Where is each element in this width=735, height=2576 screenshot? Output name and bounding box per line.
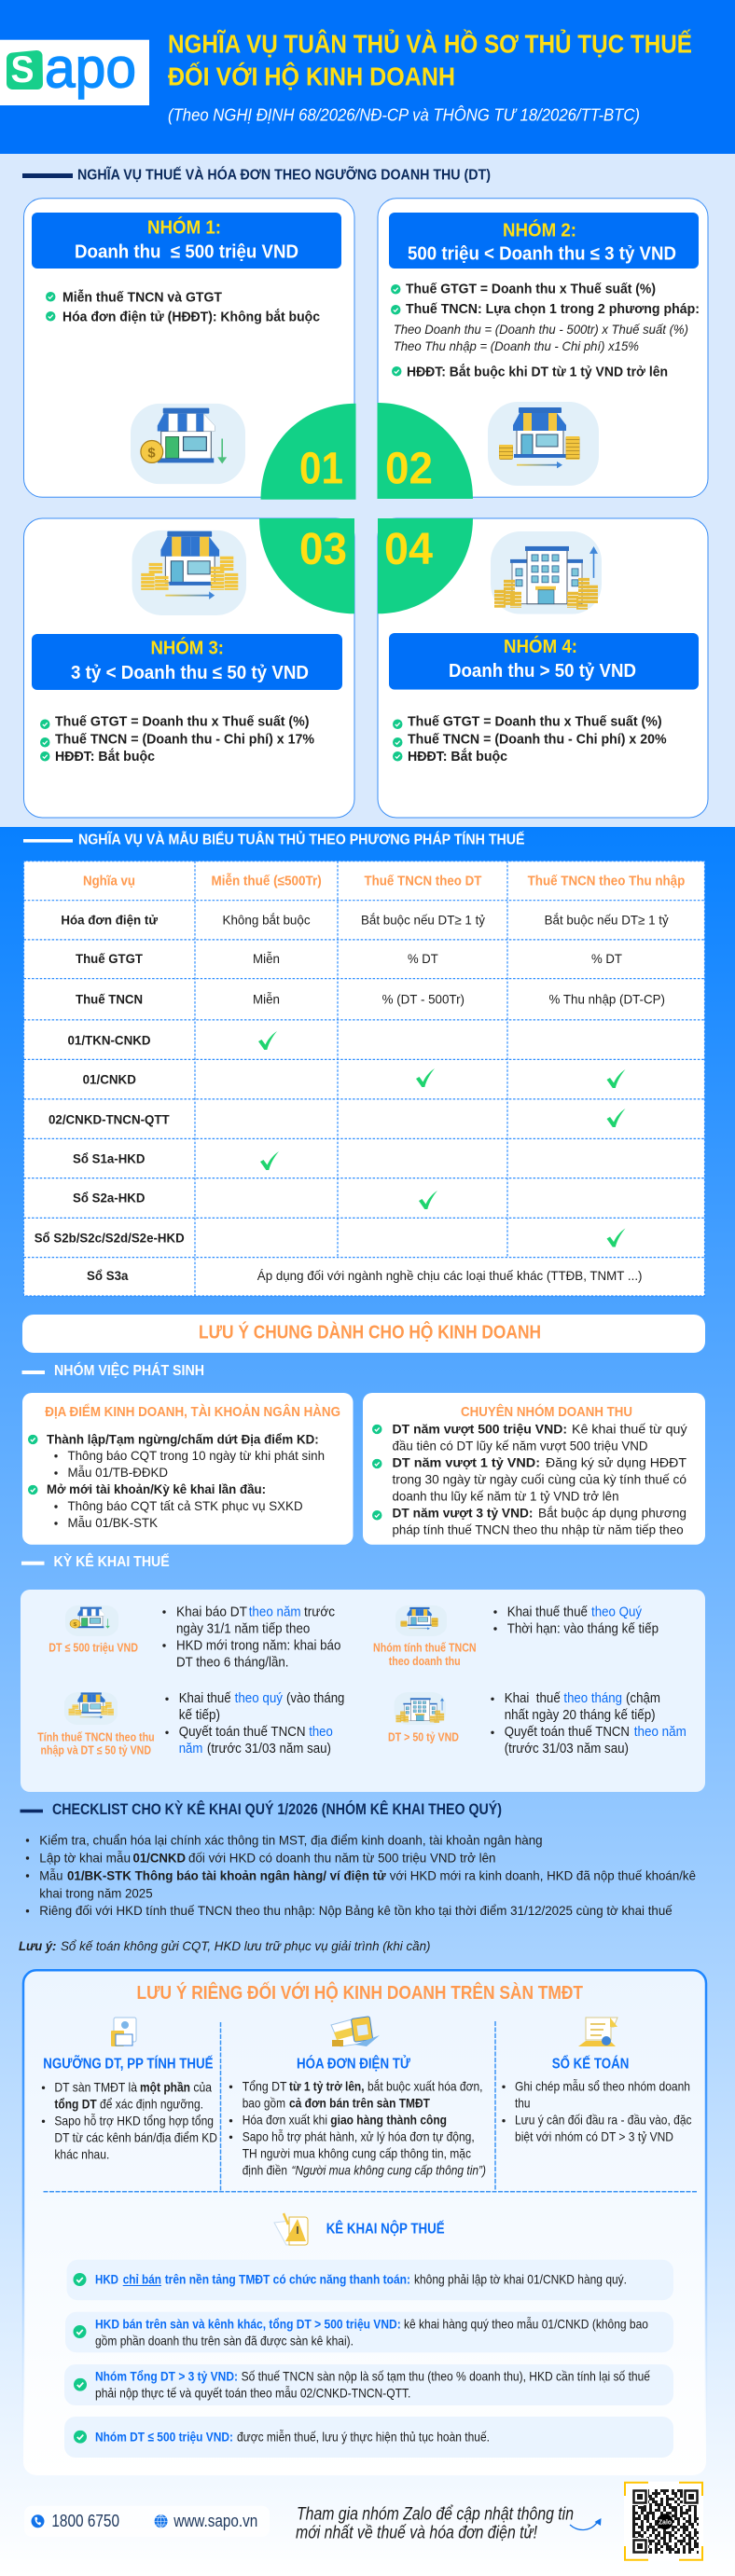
period: revenue over 50 billion: (trước 31/03 năm sau) <box>505 1742 629 1756</box>
filing note 1 <box>67 2260 673 2300</box>
checklist items: Riêng đối với HKD tính thuế TNCN theo thu nhập: Nộp Bảng kê tồn kho tại thời điểm 31/12/2025 cùng tờ khai thuế <box>39 1903 673 1918</box>
icon: phone <box>32 2514 45 2528</box>
icon: clipboard with warning <box>274 2213 308 2245</box>
banner: general notes <box>22 1315 705 1353</box>
panel: group 2: HĐĐT: Bắt buộc khi DT từ 1 tỷ VND trở lên <box>407 363 668 379</box>
period: income based tax group: năm <box>179 1742 202 1756</box>
title <box>168 29 692 91</box>
panel: group 2: Thuế TNCN: Lựa chọn 1 trong 2 phương pháp: <box>406 301 700 317</box>
contact box: www.sapo.vn <box>173 2512 257 2530</box>
panel: e-commerce notes <box>23 1970 706 2475</box>
checklist items: Mẫu <box>39 1867 62 1882</box>
panel: group 4: NHÓM 4: <box>504 635 577 657</box>
contact box <box>24 2506 270 2537</box>
panel: group 4: Doanh thu > 50 tỷ VND <box>449 661 636 682</box>
callout: join Zalo group: mới nhất về thuế và hóa đơn điện tử! <box>296 2523 538 2542</box>
panel: group 3: Thuế TNCN = (Doanh thu - Chi phí) x 17% <box>55 731 314 747</box>
checklist items: Lập tờ khai mẫu <box>39 1850 131 1865</box>
icon: globe <box>155 2514 168 2528</box>
filing note 4 <box>64 2417 673 2458</box>
number quarters 01 02 03 04: 04 <box>384 525 433 574</box>
panel: business location and bank account: Mẫu 01/TB-ĐĐKD <box>67 1465 168 1480</box>
checklist items: với HKD mới ra kinh doanh, HKD đã nộp thuế khoán/kê <box>390 1867 696 1882</box>
column: threshold and tax method: khác nhau. <box>54 2146 109 2161</box>
checklist items: đối với HKD có doanh thu năm từ 500 triệu VND trở lên <box>188 1850 496 1865</box>
table check marks <box>258 1031 625 1247</box>
table rows: Miễn <box>253 991 280 1006</box>
panel: business location and bank account: Thông báo CQT tất cả STK phục vụ SXKD <box>67 1498 303 1513</box>
table rows: Sổ S2b/S2c/S2d/S2e-HKD <box>35 1231 185 1246</box>
panel: group 1 <box>24 199 354 497</box>
heading: filing and payment: KÊ KHAI NỘP THUẾ <box>326 2219 445 2237</box>
panel: business location and bank account <box>22 1393 353 1545</box>
column: threshold and tax method: để xác định ngưỡng. <box>100 2096 203 2111</box>
panel: group 1: Hóa đơn điện tử (HĐĐT): Không bắt buộc <box>62 308 320 324</box>
table rows: 01/CNKD <box>83 1072 136 1087</box>
table rows: 01/TKN-CNKD <box>67 1032 151 1047</box>
column: accounting books: SỔ KẾ TOÁN <box>552 2054 629 2072</box>
column: threshold and tax method: tổng DT <box>54 2096 97 2111</box>
column: e-invoice: từ 1 tỷ trở lên, <box>289 2078 364 2093</box>
column: e-invoice: bắt buộc xuất hóa đơn, <box>368 2078 483 2093</box>
period: revenue under 500 million: DT ≤ 500 triệu VND <box>49 1641 138 1655</box>
period: revenue based tax group: Khai thuế thuế <box>507 1605 588 1619</box>
table rows: Miễn <box>253 951 280 966</box>
header banner <box>0 0 735 154</box>
table rows: Không bắt buộc <box>222 912 311 927</box>
period: income based tax group: Quyết toán thuế TNCN <box>179 1725 306 1740</box>
panel: revenue group change: CHUYÊN NHÓM DOANH THU <box>461 1403 632 1420</box>
filing note 2: HKD bán trên sàn và kênh khác, tổng DT > 500 triệu VND: <box>95 2316 401 2331</box>
logo: Sapo <box>0 37 149 105</box>
number quarters 01 02 03 04 <box>259 403 473 613</box>
column: accounting books: thu <box>515 2095 530 2110</box>
panel: revenue group change: Bắt buộc áp dụng phương <box>538 1505 686 1520</box>
period: income based tax group: theo <box>309 1725 333 1740</box>
period: revenue based tax group <box>373 1605 659 1668</box>
section heading: compliance table: NGHĨA VỤ VÀ MẪU BIỂU TUÂN THỦ THEO PHƯƠNG PHÁP TÍNH THUẾ <box>78 829 525 847</box>
period: revenue under 500 million: ngày 31/1 năm tiếp theo <box>176 1621 310 1636</box>
lower gradient background <box>0 827 735 2576</box>
table rows: Sổ S1a-HKD <box>73 1150 146 1165</box>
panel: revenue group change: Đăng ký sử dụng HĐĐT <box>546 1454 686 1469</box>
period: revenue under 500 million: theo năm <box>249 1605 301 1619</box>
panel: group 2: Theo Thu nhập = (Doanh thu - Chi phí) x15% <box>394 338 639 353</box>
title: ĐỐI VỚI HỘ KINH DOANH <box>168 62 455 91</box>
panel: business location and bank account: Mở mới tài khoản/Kỳ kê khai lần đầu: <box>47 1481 266 1496</box>
section heading: thresholds <box>22 165 491 184</box>
table rows: Thuế TNCN <box>76 991 143 1006</box>
panel: business location and bank account: Thành lập/Tạm ngừng/chấm dứt Địa điểm KD: <box>47 1431 319 1446</box>
note: accounting books: Sổ kế toán không gửi CQT, HKD lưu trữ phục vụ giải trình (khi cần) <box>61 1938 431 1953</box>
panel: revenue group change: đầu tiên có DT lũy kế năm vượt 500 triệu VND <box>392 1438 647 1453</box>
panel title: LƯU Ý RIÊNG ĐỐI VỚI HỘ KINH DOANH TRÊN SÀN TMĐT <box>136 1981 583 2004</box>
panel: business location and bank account: ĐỊA ĐIỂM KINH DOANH, TÀI KHOẢN NGÂN HÀNG <box>45 1403 340 1420</box>
column: e-invoice: “Người mua không cung cấp thông tin”) <box>291 2162 486 2177</box>
panel: revenue group change: doanh thu lũy kế năm từ 1 tỷ VND trở lên <box>392 1488 619 1503</box>
checklist items: khai trong năm 2025 <box>39 1885 153 1900</box>
table rows: Sổ S3a <box>87 1268 129 1283</box>
period: income based tax group: nhập và DT ≤ 50 tỷ VND <box>41 1743 151 1757</box>
period: revenue under 500 million <box>49 1605 340 1670</box>
column: threshold and tax method: một phần <box>140 2079 190 2094</box>
table rows: Sổ S2a-HKD <box>73 1190 146 1205</box>
heading: arising tasks: NHÓM VIỆC PHÁT SINH <box>54 1361 204 1379</box>
filing note 2: kê khai hàng quý theo mẫu 01/CNKD (không bao <box>404 2316 648 2331</box>
column: e-invoice: giao hàng thành công <box>330 2112 447 2127</box>
checklist items: 01/BK-STK Thông báo tài khoản ngân hàng/ ví điện tử <box>67 1867 387 1882</box>
number quarters 01 02 03 04: 03 <box>299 525 347 574</box>
panel: group 3: Thuế GTGT = Doanh thu x Thuế suất (%) <box>55 713 310 729</box>
column: accounting books <box>502 2018 692 2143</box>
period: revenue under 500 million: trước <box>304 1605 335 1619</box>
filing note 1: chỉ bán <box>123 2271 161 2286</box>
subtitle: (Theo NGHỊ ĐỊNH 68/2026/NĐ-CP và THÔNG TƯ 18/2026/TT-BTC) <box>168 104 640 124</box>
number quarters 01 02 03 04: 01 <box>299 444 343 493</box>
table header row: Miễn thuế (≤500Tr) <box>211 873 322 889</box>
table rows: Áp dụng đối với ngành nghề chịu các loại thuế khác (TTĐB, TNMT ...) <box>257 1268 642 1283</box>
panel: group 3: NHÓM 3: <box>151 637 224 659</box>
table rows <box>35 912 669 1283</box>
panel: business location and bank account: Mẫu 01/BK-STK <box>67 1515 159 1530</box>
column: e-invoice: Hóa đơn xuất khi <box>243 2112 327 2127</box>
top background <box>0 154 735 827</box>
period: income based tax group: (vào tháng <box>286 1691 344 1706</box>
period: revenue under 500 million: HKD mới trong năm: khai báo <box>176 1638 340 1653</box>
note: accounting books: Lưu ý: <box>19 1938 56 1953</box>
panel: group 2: Thuế GTGT = Doanh thu x Thuế suất (%) <box>406 281 656 296</box>
panel: revenue group change <box>363 1393 705 1545</box>
heading: arising tasks <box>22 1361 204 1379</box>
filing note 3: Nhóm Tổng DT > 3 tỷ VND: <box>95 2368 238 2383</box>
panel: filing periods <box>21 1590 705 1792</box>
icon: store with coin stacks <box>132 530 246 615</box>
filing note 3: Số thuế TNCN sàn nộp là số tạm thu (theo % doanh thu), HKD cần tính lại số thuế <box>242 2368 650 2383</box>
heading: checklist: CHECKLIST CHO KỲ KÊ KHAI QUÝ 1/2026 (NHÓM KÊ KHAI THEO QUÝ) <box>52 1800 502 1818</box>
table rows: % DT <box>408 951 438 966</box>
filing note 4: Nhóm DT ≤ 500 triệu VND: <box>95 2429 233 2444</box>
panel: revenue group change: Kê khai thuế từ quý <box>572 1421 687 1436</box>
column: threshold and tax method: của <box>193 2079 212 2094</box>
table header row <box>83 873 685 889</box>
table header row: Thuế TNCN theo DT <box>364 874 482 889</box>
period: income based tax group: theo quý <box>235 1691 284 1706</box>
period: revenue over 50 billion <box>388 1691 686 1756</box>
filing note 1: HKD <box>95 2271 118 2286</box>
filing note 1: không phải lập tờ khai 01/CNKD hàng quý. <box>414 2271 627 2286</box>
period: income based tax group: (trước 31/03 năm sau) <box>207 1742 331 1756</box>
column: e-invoice: HÓA ĐƠN ĐIỆN TỬ <box>297 2054 411 2072</box>
column: threshold and tax method: DT sàn TMĐT là <box>54 2079 137 2094</box>
column: threshold and tax method: DT từ các kênh bán/địa điểm KD <box>54 2129 217 2144</box>
period: revenue over 50 billion: theo năm <box>634 1725 686 1740</box>
table header row: Thuế TNCN theo Thu nhập <box>528 874 685 889</box>
panel: group 1: NHÓM 1: <box>147 216 221 239</box>
banner: general notes: LƯU Ý CHUNG DÀNH CHO HỘ KINH DOANH <box>199 1321 541 1343</box>
panel: revenue group change: trong 30 ngày từ ngày cuối cùng của kỳ tính thuế có <box>392 1471 686 1486</box>
panel: group 4: HĐĐT: Bắt buộc <box>408 748 507 765</box>
icon: invoice and calculator <box>331 2017 380 2046</box>
arrow to QR code <box>570 2518 601 2529</box>
period: income based tax group: Tính thuế TNCN theo thu <box>37 1730 155 1744</box>
checklist items: Kiểm tra, chuẩn hóa lại chính xác thông tin MST, địa điểm kinh doanh, tài khoản ngân hàng <box>39 1832 543 1847</box>
panel: group 3 <box>24 518 354 818</box>
QR code: Zalo <box>659 2519 672 2527</box>
logo: Sapo: apo <box>45 37 136 99</box>
panel: group 2: 500 triệu < Doanh thu ≤ 3 tỷ VND <box>408 244 676 265</box>
icon: receipt with coins <box>578 2018 617 2046</box>
panel: group 3: HĐĐT: Bắt buộc <box>55 748 155 765</box>
period: revenue over 50 billion: Quyết toán thuế TNCN <box>505 1725 630 1740</box>
filing note 3 <box>64 2364 673 2405</box>
panel: group 3: 3 tỷ < Doanh thu ≤ 50 tỷ VND <box>71 663 309 683</box>
column: e-invoice <box>229 2017 486 2177</box>
heading: filing and payment <box>274 2213 445 2245</box>
panel: group 4: Thuế TNCN = (Doanh thu - Chi phí) x 20% <box>408 731 667 747</box>
table rows: Bắt buộc nếu DT≥ 1 tỷ <box>361 912 485 927</box>
panel: group 2: Theo Doanh thu = (Doanh thu - 500tr) x Thuế suất (%) <box>394 322 688 337</box>
column: e-invoice: Tổng DT <box>243 2078 287 2093</box>
contact box: 1800 6750 <box>51 2512 119 2530</box>
table header row: Nghĩa vụ <box>83 874 135 889</box>
period: income based tax group: kế tiếp) <box>179 1708 220 1723</box>
column: threshold and tax method: Sapo hỗ trợ HKD tổng hợp tổng <box>54 2113 214 2128</box>
table rows: 02/CNKD-TNCN-QTT <box>49 1111 170 1126</box>
period: revenue based tax group: theo Quý <box>591 1605 643 1619</box>
panel: group 1: Doanh thu ≤ 500 triệu VND <box>75 242 298 263</box>
table rows: Hóa đơn điện tử <box>61 912 159 927</box>
column: accounting books: Ghi chép mẫu sổ theo nhóm doanh <box>515 2078 690 2093</box>
icon: documents and calculator <box>111 2018 136 2046</box>
filing note 2: gồm phần doanh thu trên sàn đã được sàn kê khai). <box>95 2333 354 2348</box>
column: e-invoice: định điền <box>243 2162 287 2177</box>
icon: store with small coins <box>488 402 599 486</box>
column: threshold and tax method: NGƯỠNG DT, PP TÍNH THUẾ <box>43 2053 214 2072</box>
period: revenue over 50 billion: (chậm <box>626 1691 660 1706</box>
table rows: Thuế GTGT <box>76 951 143 966</box>
period: revenue based tax group: Nhóm tính thuế TNCN <box>373 1641 477 1655</box>
heading: filing period <box>21 1552 170 1570</box>
column: e-invoice: TH người mua không cung cấp thông tin, mặc <box>243 2145 471 2160</box>
period: revenue over 50 billion: DT > 50 tỷ VND <box>388 1730 459 1744</box>
column: e-invoice: Sapo hỗ trợ phát hành, xử lý hóa đơn tự động, <box>243 2128 475 2143</box>
column: e-invoice: cả đơn bán trên sàn TMĐT <box>289 2095 430 2110</box>
column: e-invoice: bao gồm <box>243 2095 285 2110</box>
logo: Sapo: S <box>11 49 34 90</box>
panel: group 1: Miễn thuế TNCN và GTGT <box>62 289 222 305</box>
checklist items <box>26 1832 696 1918</box>
period: revenue over 50 billion: nhất ngày 20 tháng kế tiếp) <box>505 1708 656 1723</box>
icon: store with coin <box>131 404 245 484</box>
section heading: thresholds: NGHĨA VỤ THUẾ VÀ HÓA ĐƠN THEO NGƯỠNG DOANH THU (DT) <box>77 165 491 184</box>
callout: join Zalo group <box>296 2504 574 2542</box>
period: income based tax group: Khai thuế <box>179 1691 231 1706</box>
panel: business location and bank account: Thông báo CQT trong 10 ngày từ khi phát sinh <box>67 1448 325 1463</box>
panel: group 2: NHÓM 2: <box>503 218 576 241</box>
filing note 1: trên nền tảng TMĐT có chức năng thanh toán: <box>165 2271 410 2286</box>
QR code <box>624 2482 703 2561</box>
panel: group 2 <box>378 199 708 497</box>
panel: group 4 <box>378 518 708 818</box>
checklist items: 01/CNKD <box>132 1850 186 1865</box>
column: accounting books: Lưu ý cân đối đầu ra - đầu vào, đặc <box>515 2112 692 2127</box>
table rows: Bắt buộc nếu DT≥ 1 tỷ <box>545 912 669 927</box>
panel: revenue group change: DT năm vượt 1 tỷ VND: <box>392 1454 540 1469</box>
panel: revenue group change: DT năm vượt 500 triệu VND: <box>392 1421 567 1436</box>
section heading: compliance table <box>23 829 525 847</box>
compliance table <box>24 861 705 1296</box>
column: accounting books: biệt với nhóm có DT > 3 tỷ VND <box>515 2128 673 2143</box>
table rows: % (DT - 500Tr) <box>382 991 465 1006</box>
panel: revenue group change: pháp tính thuế TNCN theo thu nhập từ năm tiếp theo <box>392 1522 684 1536</box>
period: income based tax group <box>37 1691 344 1757</box>
filing note 4: được miễn thuế, lưu ý thực hiện thủ tục hoàn thuế. <box>237 2429 490 2444</box>
filing note 3: phải nộp thực tế và quyết toán theo mẫu 02/CNKD-TNCN-QTT. <box>95 2385 410 2400</box>
callout: join Zalo group: Tham gia nhóm Zalo để cập nhật thông tin <box>297 2504 574 2524</box>
table rows: % DT <box>591 951 622 966</box>
period: revenue over 50 billion: Khai thuế <box>505 1691 561 1706</box>
period: revenue based tax group: theo doanh thu <box>389 1654 461 1668</box>
panel: group 4: Thuế GTGT = Doanh thu x Thuế suất (%) <box>408 713 662 729</box>
icon: office building with coins <box>491 531 602 614</box>
period: revenue under 500 million: DT theo 6 tháng/lần. <box>176 1655 289 1670</box>
panel: revenue group change: DT năm vượt 3 tỷ VND: <box>392 1505 534 1520</box>
filing note 2 <box>65 2312 673 2352</box>
period: revenue under 500 million: Khai báo DT <box>176 1605 247 1619</box>
table rows: % Thu nhập (DT-CP) <box>548 991 665 1006</box>
period: revenue based tax group: Thời hạn: vào tháng kế tiếp <box>507 1621 659 1636</box>
column: threshold and tax method <box>42 2018 217 2161</box>
period: revenue over 50 billion: theo tháng <box>563 1691 622 1706</box>
number quarters 01 02 03 04: 02 <box>385 444 433 493</box>
heading: filing period: KỲ KÊ KHAI THUẾ <box>54 1552 170 1570</box>
